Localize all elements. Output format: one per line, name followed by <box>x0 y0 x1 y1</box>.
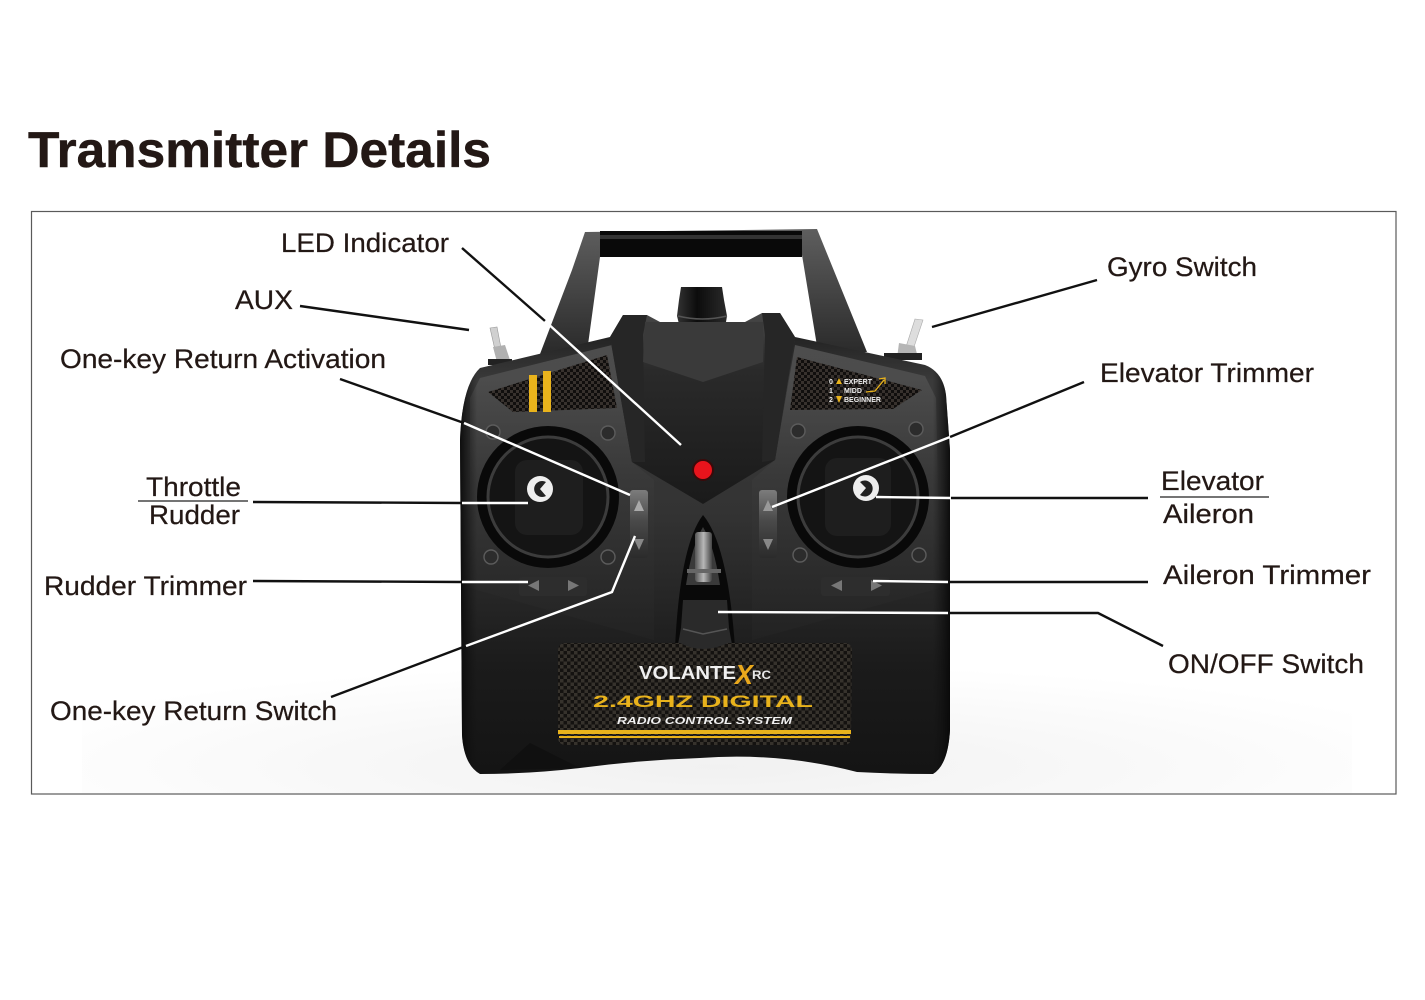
LED indicator light <box>693 460 713 480</box>
left vertical trim button <box>630 490 648 558</box>
center shield <box>610 313 795 504</box>
right carbon panel with mode legend: 2 <box>829 397 833 404</box>
floor shadow <box>82 620 1352 793</box>
label: Throttle / Rudder <box>138 472 248 530</box>
carbon brand plate: RADIO CONTROL SYSTEM <box>617 716 793 727</box>
label: Gyro Switch: Gyro Switch <box>1107 252 1257 282</box>
right horizontal trim button <box>821 577 890 596</box>
right carbon panel with mode legend: EXPERT <box>844 379 873 386</box>
label: One-key Return Switch: One-key Return Switch <box>50 696 337 726</box>
left carbon panel <box>488 355 617 412</box>
carrying handle <box>540 229 867 354</box>
mounting screws <box>484 422 926 564</box>
center power switch <box>675 515 735 650</box>
lower body chamfer <box>500 743 580 770</box>
left horizontal trim button <box>519 577 587 596</box>
label: AUX: AUX <box>235 285 293 315</box>
label: Rudder Trimmer: Rudder Trimmer <box>44 571 247 601</box>
right carbon panel with mode legend <box>790 357 922 410</box>
label: One-key Return Activation: One-key Return Activation <box>60 344 386 374</box>
carbon brand plate <box>558 643 852 745</box>
right carbon panel with mode legend: MIDD <box>844 388 862 395</box>
carbon brand plate: 2.4GHZ DIGITAL <box>593 692 813 711</box>
left toggle switch <box>488 327 512 365</box>
label: Elevator / Aileron <box>1160 466 1269 529</box>
leader lines, white over the device <box>462 321 951 646</box>
title: Transmitter Details <box>28 122 491 178</box>
leader lines, black outside the device <box>253 248 1163 697</box>
right carbon panel with mode legend: BEGINNER <box>844 397 881 404</box>
carbon brand plate: VOLANTE <box>639 663 736 683</box>
label: Throttle / Rudder: Rudder <box>149 500 240 530</box>
left stick gimbal <box>477 426 619 568</box>
label: ON/OFF Switch: ON/OFF Switch <box>1168 649 1364 679</box>
label: Aileron Trimmer: Aileron Trimmer <box>1163 560 1371 590</box>
diagram frame <box>32 212 1396 794</box>
transmitter body <box>460 337 950 774</box>
right stick gimbal <box>787 426 929 568</box>
antenna knob <box>677 287 727 332</box>
label: Elevator Trimmer: Elevator Trimmer <box>1100 358 1314 388</box>
label: Throttle / Rudder: Throttle <box>146 472 241 502</box>
right carbon panel with mode legend: 0 <box>829 379 833 386</box>
right toggle switch <box>884 319 923 360</box>
right vertical trim button <box>759 490 777 558</box>
label: Elevator / Aileron: Elevator <box>1161 466 1264 496</box>
transmitter device <box>460 229 950 774</box>
carbon brand plate: X <box>733 659 755 690</box>
carbon brand plate: RC <box>752 668 771 682</box>
label: LED Indicator: LED Indicator <box>281 228 449 258</box>
right carbon panel with mode legend: 1 <box>829 388 833 395</box>
label: Elevator / Aileron: Aileron <box>1163 499 1254 529</box>
upper deck around the sticks <box>470 345 940 640</box>
